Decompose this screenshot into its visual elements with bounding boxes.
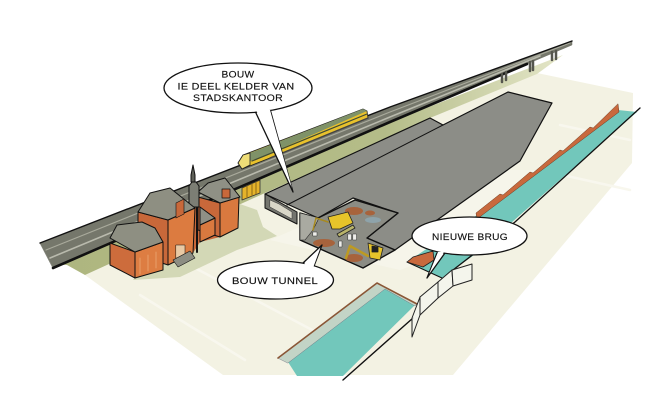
building shadow — [133, 203, 277, 280]
excavation pit — [300, 200, 398, 268]
bubble text: BOUW TUNNEL — [232, 276, 318, 287]
excavator lower — [346, 243, 383, 260]
speech bubble: nieuwe brug — [412, 217, 527, 278]
speech bubble: bouw tunnel — [218, 245, 334, 299]
train — [238, 109, 368, 169]
excavator upper — [313, 212, 355, 237]
speech bubble: kelder stadskantoor — [164, 63, 312, 192]
left wing — [110, 222, 163, 278]
entrance steps — [173, 251, 195, 267]
bubble text: IE DEEL KELDER VAN — [178, 82, 294, 92]
new bridge — [412, 264, 472, 337]
soil heaps — [313, 207, 375, 262]
canal: right water — [407, 108, 640, 278]
bubble text: BOUW — [222, 70, 254, 80]
bubble text: STADSKANTOOR — [193, 93, 283, 104]
bubble text: NIEUWE BRUG — [432, 232, 508, 243]
water puddle — [365, 217, 381, 223]
grass strip — [53, 55, 563, 275]
workers — [313, 232, 356, 247]
bubble text — [178, 70, 294, 104]
canal: lower water — [278, 283, 417, 380]
tower — [189, 165, 199, 207]
main roof slab — [265, 92, 552, 250]
connecting wing — [200, 207, 215, 242]
brick backing — [168, 205, 220, 262]
viaduct pillars — [502, 51, 556, 82]
yellow platform shelter — [242, 180, 260, 200]
railway track — [40, 41, 572, 268]
central block — [138, 188, 197, 265]
ground plane — [85, 73, 633, 375]
right block — [198, 178, 240, 237]
station building — [110, 165, 240, 278]
sheet pile wall — [407, 104, 619, 267]
